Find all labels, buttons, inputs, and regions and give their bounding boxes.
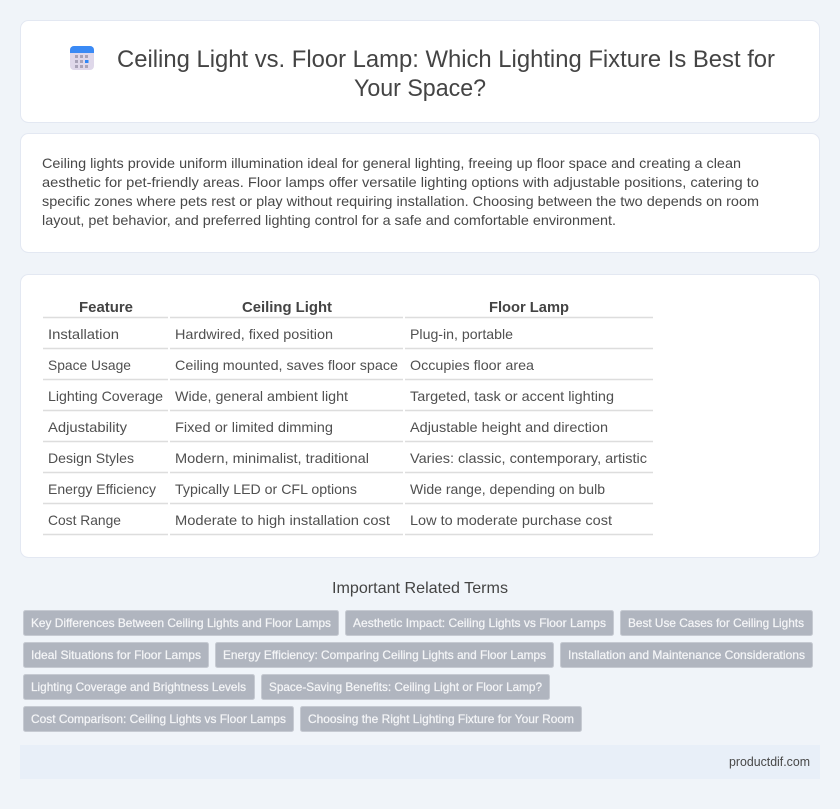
table row: Installation: Hardwired, fixed position bbox=[175, 326, 333, 342]
intro text: Ceiling lights provide uniform illumination ideal for general lighting, freeing up floor space and creating a clean bbox=[42, 155, 741, 171]
tag bbox=[560, 642, 812, 668]
table row: Lighting Coverage bbox=[48, 388, 614, 404]
tag bbox=[262, 674, 550, 700]
table row: Adjustability: Adjustability bbox=[48, 419, 127, 435]
tag: Lighting Coverage and Brightness Levels bbox=[31, 680, 246, 694]
title: Your Space? bbox=[354, 75, 486, 102]
icon: calendar bbox=[70, 46, 94, 70]
panel: introduction bbox=[20, 134, 820, 252]
table row: Installation: Installation bbox=[48, 326, 119, 342]
table row: Lighting Coverage: Wide, general ambient light bbox=[175, 388, 348, 404]
tag: Space-Saving Benefits: Ceiling Light or Floor Lamp? bbox=[269, 680, 542, 694]
table row: Energy Efficiency: Energy Efficiency bbox=[48, 481, 156, 497]
tag: Choosing the Right Lighting Fixture for Your Room bbox=[308, 712, 574, 726]
table row: Design Styles: Modern, minimalist, traditional bbox=[175, 450, 369, 466]
tag: Energy Efficiency: Comparing Ceiling Lights and Floor Lamps bbox=[223, 648, 546, 662]
intro text bbox=[42, 155, 759, 228]
tag bbox=[300, 706, 582, 732]
table row: Space Usage: Ceiling mounted, saves floor space bbox=[175, 357, 398, 373]
intro text: layout, pet behavior, and preferred lighting control for a safe and comfortable environment. bbox=[42, 212, 616, 228]
panel: header bbox=[20, 20, 820, 122]
table row: Design Styles: Varies: classic, contemporary, artistic bbox=[410, 450, 647, 466]
table row: Cost Range: Cost Range bbox=[48, 512, 121, 528]
intro text: specific zones where pets rest or play without requiring installation. Choosing between the two depends on room bbox=[42, 193, 759, 209]
tag bbox=[620, 610, 812, 636]
table row: Adjustability bbox=[48, 419, 608, 435]
tag: Best Use Cases for Ceiling Lights bbox=[628, 616, 804, 630]
table header: Feature bbox=[79, 299, 133, 316]
table row: Adjustability: Adjustable height and direction bbox=[410, 419, 608, 435]
tag bbox=[216, 642, 554, 668]
tag: Installation and Maintenance Considerations bbox=[568, 648, 805, 662]
tag bbox=[346, 610, 614, 636]
table row: Adjustability: Fixed or limited dimming bbox=[175, 419, 333, 435]
table row: Cost Range bbox=[48, 512, 612, 528]
table row: Installation bbox=[48, 326, 513, 342]
footer source: productdif.com bbox=[729, 754, 810, 769]
table row: Energy Efficiency bbox=[48, 481, 605, 497]
table row: Energy Efficiency: Wide range, depending on bulb bbox=[410, 481, 605, 497]
table row: Design Styles bbox=[48, 450, 647, 466]
tag: Key Differences Between Ceiling Lights and Floor Lamps bbox=[31, 616, 331, 630]
footer bbox=[20, 745, 820, 779]
table row: Space Usage: Occupies floor area bbox=[410, 357, 534, 373]
intro text: aesthetic for pet-friendly areas. Floor lamps offer versatile lighting options with adjustable positions, catering to bbox=[42, 174, 759, 190]
table row: Installation: Plug-in, portable bbox=[410, 326, 513, 342]
title: Ceiling Light vs. Floor Lamp: Which Lighting Fixture Is Best for bbox=[117, 46, 775, 73]
tag: Ideal Situations for Floor Lamps bbox=[31, 648, 201, 662]
table header bbox=[79, 299, 569, 316]
tag: Cost Comparison: Ceiling Lights vs Floor Lamps bbox=[31, 712, 286, 726]
title bbox=[117, 46, 775, 102]
table row: Space Usage: Space Usage bbox=[48, 357, 131, 373]
table row: Cost Range: Low to moderate purchase cost bbox=[410, 512, 612, 528]
table row: Space Usage bbox=[48, 357, 534, 373]
table header: Floor Lamp bbox=[489, 299, 569, 316]
tag bbox=[24, 642, 208, 668]
tag bbox=[24, 610, 338, 636]
tag bbox=[24, 706, 294, 732]
heading: related terms: Important Related Terms bbox=[332, 580, 508, 597]
table row: Lighting Coverage: Lighting Coverage bbox=[48, 388, 163, 404]
table row: Lighting Coverage: Targeted, task or accent lighting bbox=[410, 388, 614, 404]
related term tags bbox=[24, 610, 812, 732]
table row: Cost Range: Moderate to high installation cost bbox=[175, 512, 390, 528]
tag: Aesthetic Impact: Ceiling Lights vs Floor Lamps bbox=[353, 616, 606, 630]
table header: Ceiling Light bbox=[242, 299, 332, 316]
panel: comparison table bbox=[20, 274, 820, 558]
table row: Energy Efficiency: Typically LED or CFL options bbox=[175, 481, 357, 497]
tag bbox=[24, 674, 254, 700]
table row: Design Styles: Design Styles bbox=[48, 450, 134, 466]
